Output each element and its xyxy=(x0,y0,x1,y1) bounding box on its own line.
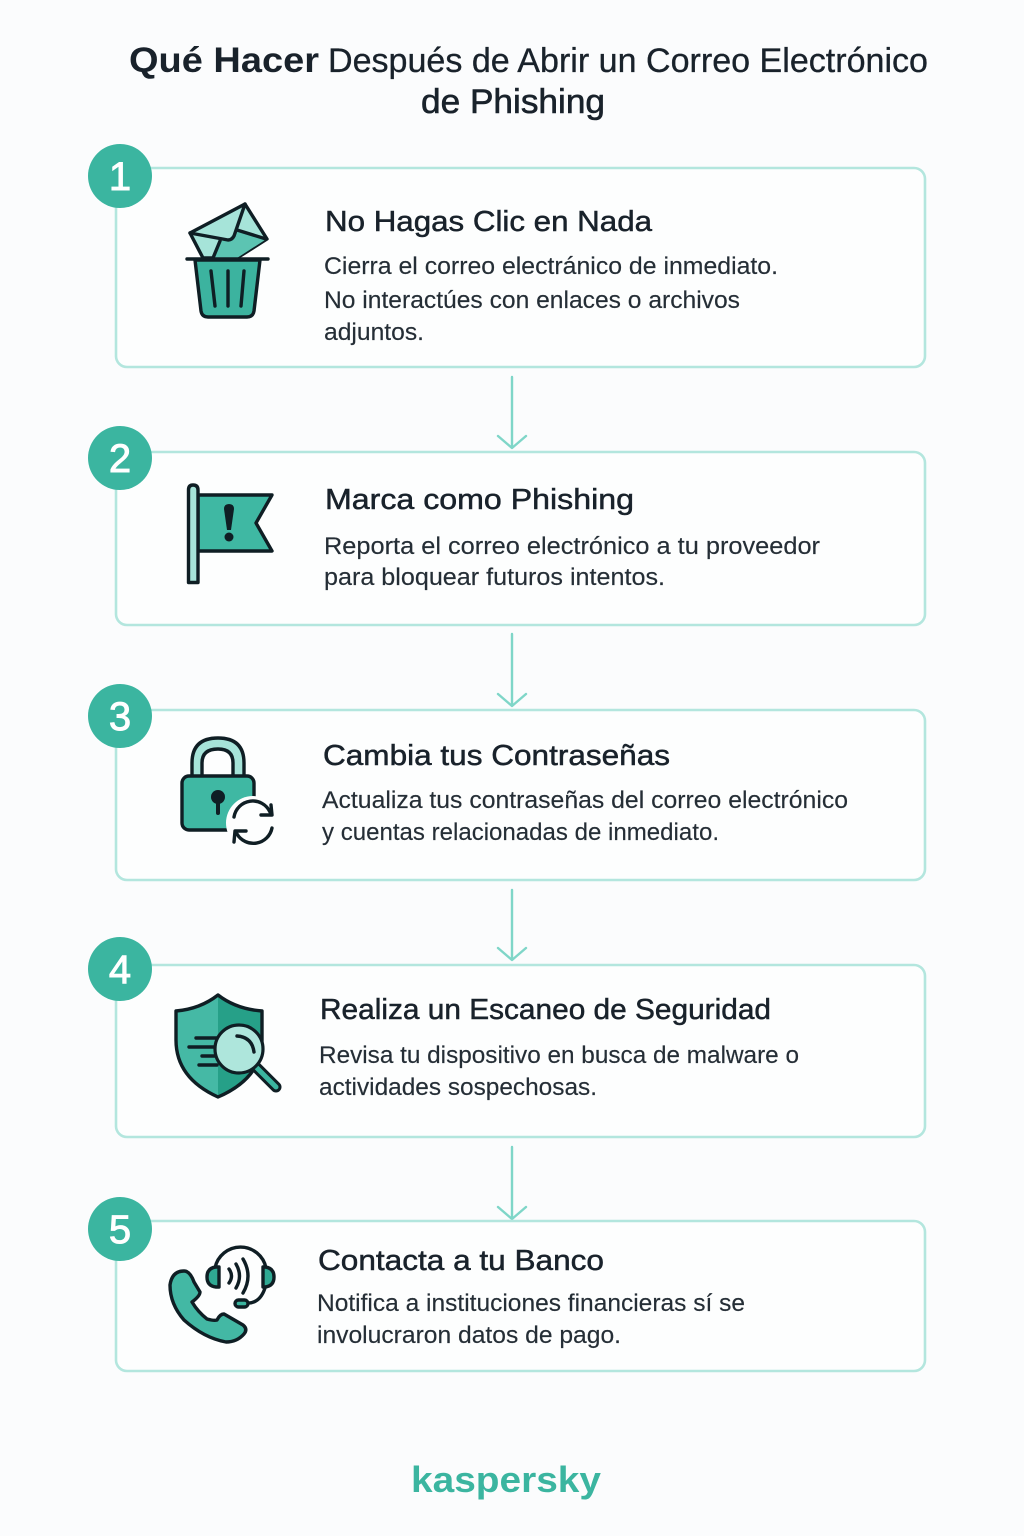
panel: step 4 xyxy=(88,937,925,1137)
step 1 badge: 1 xyxy=(109,155,131,199)
step 4 text: Revisa tu dispositivo en busca de malware o xyxy=(319,1042,799,1069)
step 4 badge xyxy=(88,937,152,1001)
arrow 3 to 4 xyxy=(498,890,526,960)
step 5 text: involucraron datos de pago. xyxy=(317,1322,621,1349)
step 1 text: No interactúes con enlaces o archivos xyxy=(324,287,740,314)
step 3 text: Actualiza tus contraseñas del correo electrónico xyxy=(322,787,848,814)
step 3 text: Cambia tus Contraseñas xyxy=(323,740,670,772)
title: de Phishing xyxy=(421,83,605,121)
icon: shield with magnifier xyxy=(176,995,276,1097)
step 1 text: No Hagas Clic en Nada xyxy=(325,206,653,238)
step 3 badge xyxy=(88,684,152,748)
step 2 text xyxy=(324,484,820,591)
step 3 text: y cuentas relacionadas de inmediato. xyxy=(322,819,719,846)
icon: envelope in trash bin xyxy=(187,204,268,317)
panel: step 5 xyxy=(88,1197,925,1371)
step 1 text xyxy=(324,206,778,346)
step 1 badge xyxy=(88,144,152,208)
step 1 text: adjuntos. xyxy=(324,319,424,346)
step 4 badge: 4 xyxy=(109,948,131,992)
step 2 badge: 2 xyxy=(109,437,131,481)
step 3 badge: 3 xyxy=(109,695,131,739)
arrow 2 to 3 xyxy=(498,634,526,706)
step 1 text: Cierra el correo electránico de inmediato. xyxy=(324,253,778,280)
arrow 1 to 2 xyxy=(498,377,526,448)
step 5 text: Contacta a tu Banco xyxy=(318,1245,604,1277)
icon: phone with headset xyxy=(170,1247,274,1342)
title xyxy=(129,41,928,121)
step 4 text xyxy=(319,994,799,1101)
step 5 text: Notifica a instituciones financieras sí se xyxy=(317,1290,745,1317)
step 4 text: actividades sospechosas. xyxy=(319,1074,597,1101)
step 2 badge xyxy=(88,426,152,490)
step 2 text: para bloquear futuros intentos. xyxy=(324,564,665,591)
panel: step 2 xyxy=(88,426,925,625)
step 5 badge xyxy=(88,1197,152,1261)
step 2 text: Marca como Phishing xyxy=(325,484,634,516)
panel: step 1 xyxy=(88,144,925,367)
icon: flag with exclamation xyxy=(188,485,272,582)
panel: step 3 xyxy=(88,684,925,880)
step 4 text: Realiza un Escaneo de Seguridad xyxy=(320,994,771,1026)
step 5 badge: 5 xyxy=(109,1208,131,1252)
step 5 text xyxy=(317,1245,745,1349)
title: Qué Hacer xyxy=(129,41,319,80)
icon: padlock with sync arrows xyxy=(182,738,280,850)
title: Después de Abrir un Correo Electrónico xyxy=(328,42,928,80)
arrow 4 to 5 xyxy=(498,1147,526,1219)
step 3 text xyxy=(322,740,848,846)
step 2 text: Reporta el correo electrónico a tu proveedor xyxy=(324,533,820,560)
logo: kaspersky: kaspersky xyxy=(411,1459,601,1500)
